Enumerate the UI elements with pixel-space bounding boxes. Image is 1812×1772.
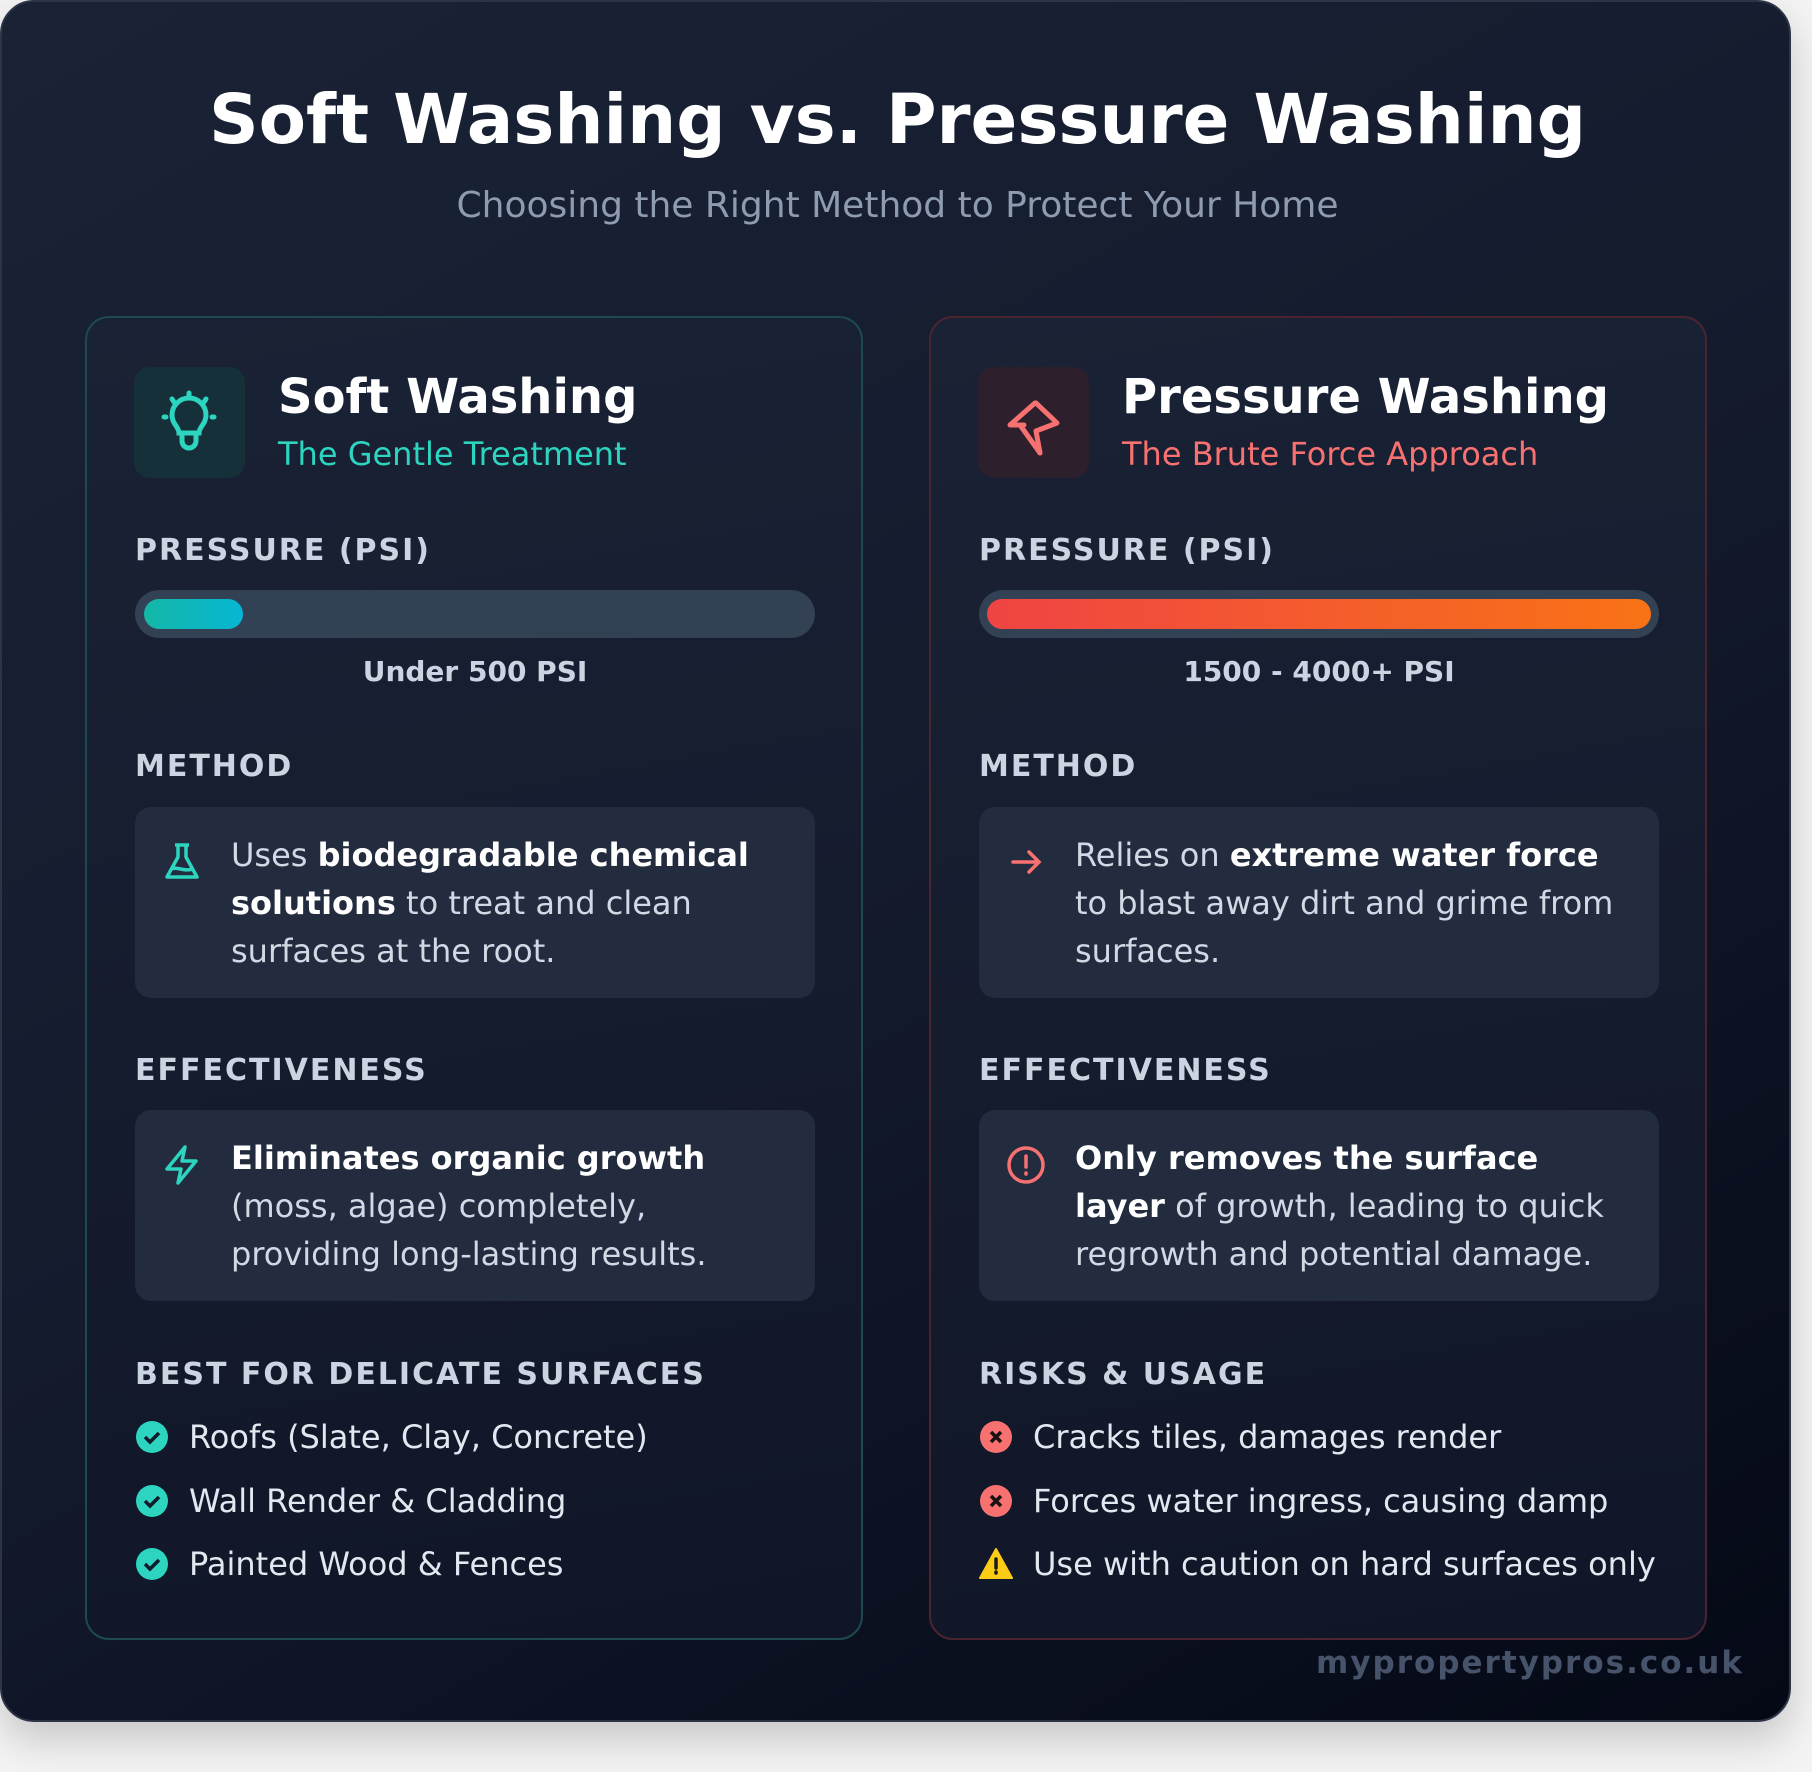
icon: arrow xyxy=(1011,850,1042,874)
label: effectiveness: EFFECTIVENESS xyxy=(135,1053,428,1088)
method box: solutions to treat and clean xyxy=(231,884,692,922)
pressure bar xyxy=(135,590,815,638)
effectiveness box xyxy=(979,1110,1659,1301)
heading: Soft Washing xyxy=(278,369,637,425)
icon: bolt xyxy=(165,1145,198,1185)
panel: pressure washing xyxy=(929,316,1707,1640)
label: pressure: PRESSURE (PSI) xyxy=(135,533,431,568)
list item: Use with caution on hard surfaces only xyxy=(1033,1545,1656,1583)
method box xyxy=(979,807,1659,998)
label: method: METHOD xyxy=(135,749,293,784)
psi value: Under 500 PSI xyxy=(363,655,587,688)
label: effectiveness: EFFECTIVENESS xyxy=(979,1053,1272,1088)
list item: Wall Render & Cladding xyxy=(189,1482,566,1520)
method box xyxy=(135,807,815,998)
list item: Painted Wood & Fences xyxy=(189,1545,563,1583)
method box: surfaces. xyxy=(1075,932,1220,970)
icon: alert xyxy=(1007,1146,1045,1184)
method box: surfaces at the root. xyxy=(231,932,555,970)
list item: Roofs (Slate, Clay, Concrete) xyxy=(189,1418,648,1456)
label: pressure: PRESSURE (PSI) xyxy=(979,533,1275,568)
effectiveness box: providing long-lasting results. xyxy=(231,1235,706,1273)
effectiveness box: Only removes the surface xyxy=(1075,1139,1538,1177)
list item: Forces water ingress, causing damp xyxy=(1033,1482,1608,1520)
subheading: The Gentle Treatment xyxy=(278,435,627,473)
effectiveness box: layer of growth, leading to quick xyxy=(1075,1187,1604,1225)
panel: soft washing xyxy=(85,316,863,1640)
icon: flask xyxy=(165,843,199,879)
method box: Relies on extreme water force xyxy=(1075,836,1599,874)
effectiveness box: regrowth and potential damage. xyxy=(1075,1235,1592,1273)
heading: Pressure Washing xyxy=(1122,369,1609,425)
label: best for: BEST FOR DELICATE SURFACES xyxy=(135,1357,706,1392)
icon: broken bolt xyxy=(978,367,1089,478)
title: Soft Washing vs. Pressure Washing xyxy=(209,80,1586,160)
list item: Cracks tiles, damages render xyxy=(1033,1418,1501,1456)
subtitle: Choosing the Right Method to Protect Your Home xyxy=(456,185,1339,226)
label: risks: RISKS & USAGE xyxy=(979,1357,1267,1392)
psi value: 1500 - 4000+ PSI xyxy=(1183,655,1455,688)
effectiveness box xyxy=(135,1110,815,1301)
label: method: METHOD xyxy=(979,749,1137,784)
subheading: The Brute Force Approach xyxy=(1122,435,1538,473)
method box: Uses biodegradable chemical xyxy=(231,836,749,874)
footer: mypropertypros.co.uk xyxy=(1316,1645,1744,1681)
icon: lightbulb xyxy=(134,367,245,478)
pressure bar xyxy=(979,590,1659,638)
method box: to blast away dirt and grime from xyxy=(1075,884,1613,922)
effectiveness box: Eliminates organic growth xyxy=(231,1139,705,1177)
effectiveness box: (moss, algae) completely, xyxy=(231,1187,646,1225)
